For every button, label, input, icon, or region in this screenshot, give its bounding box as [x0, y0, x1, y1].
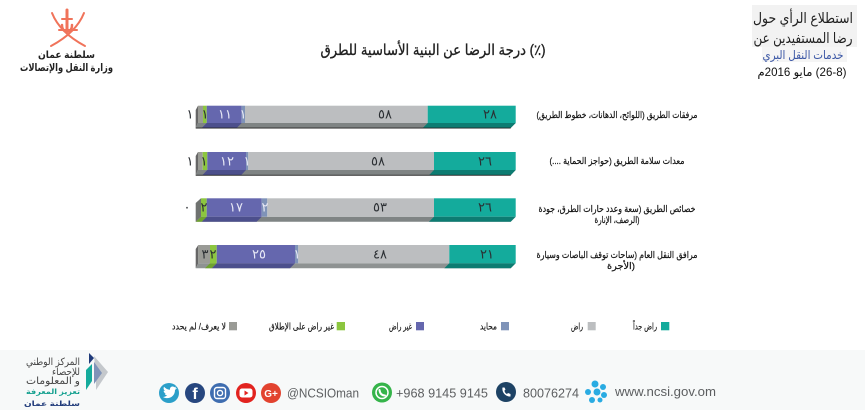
NCSI logo: سلطنة عمان: [24, 401, 80, 408]
icon: twitter: [159, 383, 179, 403]
icon: globe: [585, 380, 607, 403]
bar row 1: [187, 106, 516, 128]
icon: facebook: [185, 383, 205, 403]
icon: google plus: G+: [264, 389, 278, 400]
category labels: مرافق النقل العام (ساحات توقف الباصات وسيارة: [536, 250, 698, 261]
bar row 2: ١: [187, 154, 193, 168]
icon: google plus: [261, 383, 281, 403]
bar row 1: ١: [202, 106, 208, 122]
legend: راض جداً: [632, 320, 657, 332]
NCSI logo: [24, 353, 108, 408]
bar row 4: [196, 245, 516, 268]
bar row 3: ٠: [184, 200, 190, 214]
bar row 1: ١: [240, 106, 246, 122]
bar row 1: ٥٨: [378, 106, 392, 122]
legend: محايد: [480, 322, 497, 332]
bar row 2: ٥٨: [371, 154, 385, 168]
bar row 3: [184, 198, 516, 222]
icon: youtube: [236, 383, 256, 403]
icon: instagram: [210, 383, 230, 403]
header: survey title: (26-8) مايو 2016م: [758, 65, 846, 80]
icon: whatsapp: [372, 382, 392, 402]
stacked bar chart: [184, 106, 516, 268]
bar row 3: ١٧: [229, 200, 243, 214]
phone number: 80076274: [523, 386, 579, 400]
bar row 1: ١: [187, 106, 193, 122]
ministry logo: وزارة النقل والإتصالات: [20, 62, 113, 74]
legend: غير راض على الإطلاق: [269, 322, 334, 332]
bar row 4: ١: [294, 246, 300, 262]
bar row 2: ١٢: [220, 154, 234, 168]
legend: راض: [571, 322, 583, 332]
bar row 3: ٢٦: [478, 200, 492, 214]
NCSI logo: تعزيز المعرفة: [26, 389, 80, 396]
category labels: خصائص الطريق (سعة وعدد حارات الطرق، جودة: [538, 204, 696, 215]
category labels: مرفقات الطريق (اللوائح، الدهانات، خطوط الطريق): [536, 110, 698, 121]
icon: NCSI chevron mark: [86, 353, 108, 390]
category labels: الأجرة): [607, 260, 635, 272]
bar row 2: ١: [201, 154, 207, 168]
bar row 1: ٢٨: [483, 106, 497, 122]
header: survey title: [752, 5, 857, 80]
bar row 2: ١: [244, 154, 250, 168]
footer contact bar: [159, 380, 716, 403]
bar row 1: ١١: [218, 106, 232, 122]
ministry logo: سلطنة عمان: [38, 50, 95, 61]
bar row 3: ٢: [201, 200, 208, 214]
category labels: الرصف، الإنارة): [594, 215, 640, 226]
icon: national emblem: [51, 10, 85, 46]
social handle: @NCSIOman: [287, 386, 359, 400]
bar row 4: ٤٨: [373, 246, 387, 262]
bar row 4: ٣: [202, 246, 209, 262]
website: www.ncsi.gov.om: [614, 384, 716, 399]
NCSI logo: و المعلومات: [26, 376, 80, 387]
NCSI logo: المركز الوطني: [26, 357, 80, 368]
category labels: [536, 110, 698, 272]
ministry logo: [20, 10, 113, 74]
legend: لا يعرف/ لم يحدد: [172, 322, 226, 332]
bar row 2: ٢٦: [478, 154, 492, 168]
bar row 3: ٥٣: [373, 200, 387, 214]
bar row 4: ٢: [210, 246, 217, 262]
bar row 2: [187, 152, 516, 176]
bar row 4: ٢١: [480, 246, 494, 262]
NCSI logo: للإحصاء: [52, 367, 80, 378]
legend: [172, 320, 669, 332]
legend: غير راض: [389, 322, 412, 332]
icon: facebook: f: [192, 386, 198, 403]
chart title: درجة الرضا عن البنية الأساسية للطرق (٪): [320, 40, 546, 59]
whatsapp number: +968 9145 9145: [396, 386, 488, 400]
icon: phone: [496, 382, 516, 402]
category labels: معدات سلامة الطريق (حواجز الحماية ....): [550, 156, 684, 167]
bar row 4: ٢٥: [252, 246, 266, 262]
bar row 3: ٢: [262, 200, 269, 214]
header: survey title: خدمات النقل البري: [762, 48, 844, 63]
